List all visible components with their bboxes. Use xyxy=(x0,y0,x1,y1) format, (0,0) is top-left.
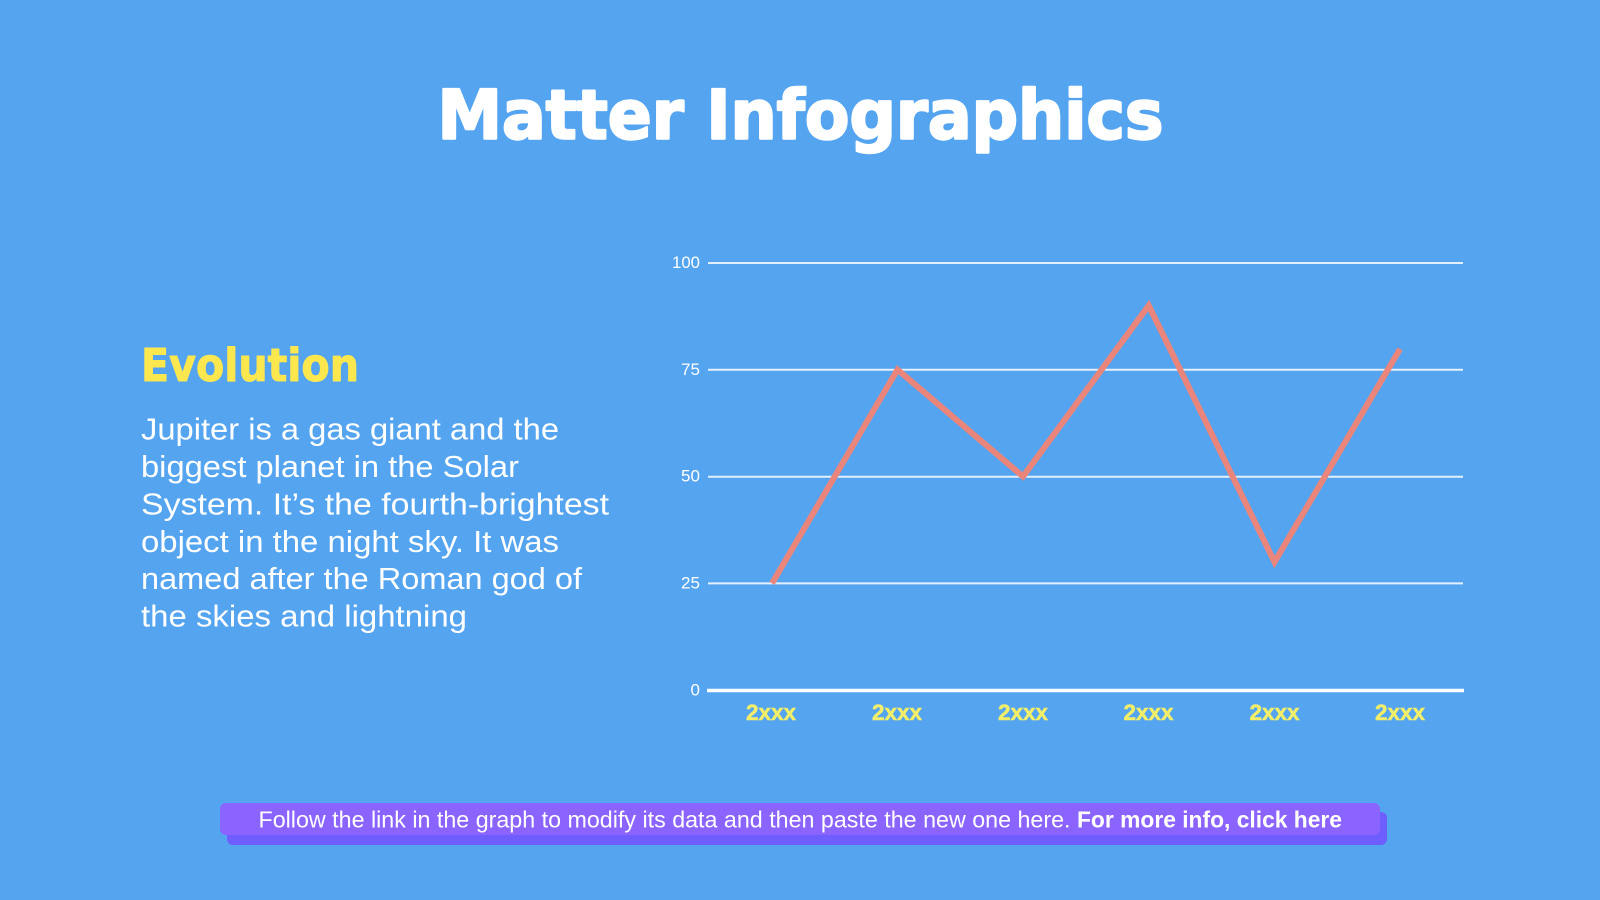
x axis labels: 2xxx xyxy=(1375,700,1426,725)
body text: System. It’s the fourth-brightest xyxy=(141,486,609,521)
banner shadow xyxy=(227,812,1387,845)
heading: Evolution: Evolution xyxy=(141,339,359,392)
banner text: For more info, click here xyxy=(1077,806,1342,832)
grid lines xyxy=(708,263,1463,583)
y axis labels: 100 xyxy=(672,253,700,272)
body text: Jupiter is a gas giant and the xyxy=(141,412,559,447)
banner text: Follow the link in the graph to modify its data and then paste the new one here. xyxy=(258,806,1070,832)
y axis labels: 50 xyxy=(681,466,700,486)
x axis labels: 2xxx xyxy=(746,700,797,725)
x axis labels: 2xxx xyxy=(998,700,1049,725)
y axis labels: 25 xyxy=(681,574,700,592)
data line xyxy=(772,306,1400,583)
banner front xyxy=(220,803,1380,835)
x axis labels: 2xxx xyxy=(1250,700,1300,725)
body text: the skies and lightning xyxy=(141,598,467,634)
panel: evolution text xyxy=(141,339,609,634)
x axis labels: 2xxx xyxy=(872,700,923,725)
x axis labels xyxy=(746,700,1426,725)
body text xyxy=(141,412,609,634)
x axis labels: 2xxx xyxy=(1124,700,1174,725)
y axis labels: 75 xyxy=(681,360,700,379)
body text: object in the night sky. It was xyxy=(141,524,559,559)
footer banner xyxy=(220,803,1387,845)
title: Matter Infographics xyxy=(438,76,1164,156)
y axis labels: 0 xyxy=(691,680,700,700)
y axis labels xyxy=(672,253,700,700)
body text: named after the Roman god of xyxy=(141,561,582,596)
line chart xyxy=(672,253,1464,725)
x axis xyxy=(707,689,1464,692)
body text: biggest planet in the Solar xyxy=(141,449,519,484)
